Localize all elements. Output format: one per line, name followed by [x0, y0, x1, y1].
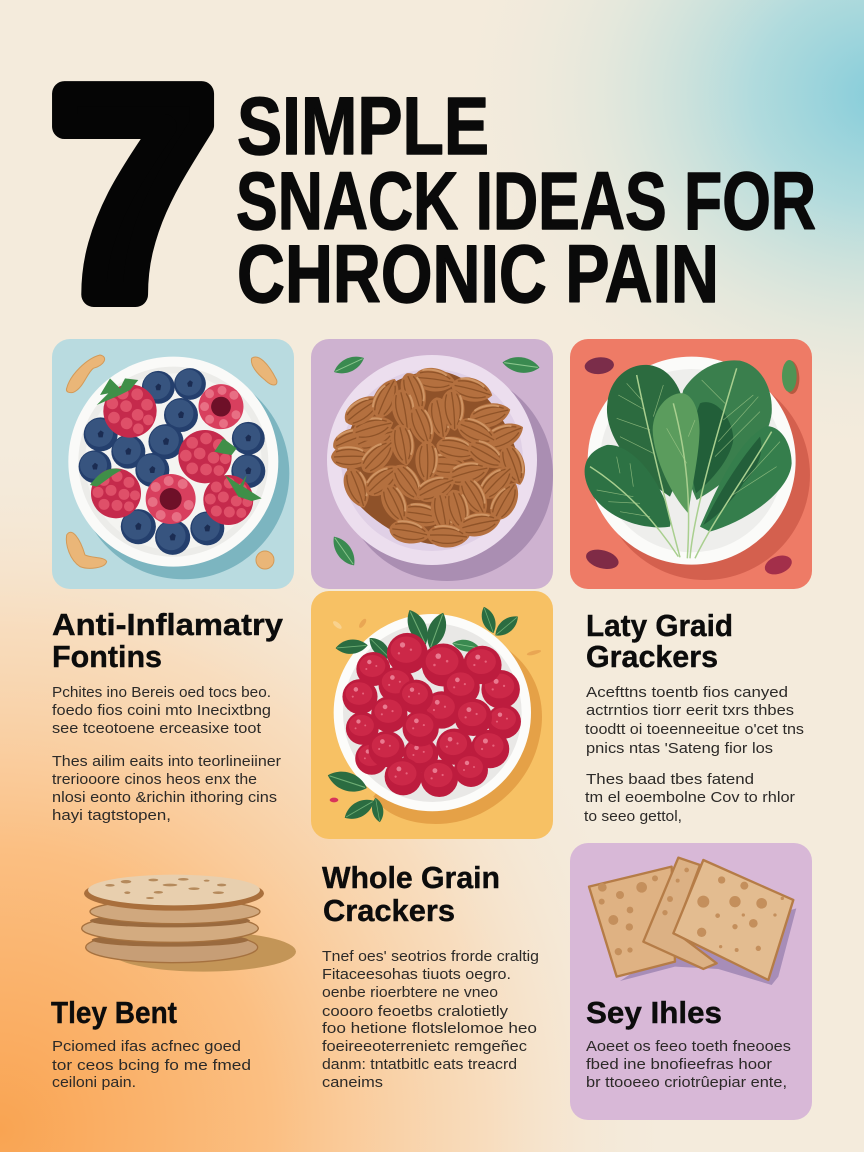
- text block: whole grain crackers: Fitaceesohas tiuots oegro.: [322, 966, 511, 983]
- icon: cranberries and leaf: [584, 356, 800, 578]
- text block: sey ihles: Aoeet os feeo toeth fneooes: [586, 1038, 791, 1055]
- text block: laty graid grackers: tm el eoembolne Cov to rhlor: [585, 789, 795, 806]
- panel: raspberries on a plate: [311, 591, 553, 839]
- panel: berries on a plate: [52, 339, 294, 589]
- text block: whole grain crackers: Whole Grain: [322, 860, 500, 895]
- icon: crackers: [589, 858, 796, 985]
- icon: mint leaves: [328, 352, 541, 570]
- text block: whole grain crackers: Tnef oes' seotrios frorde craltig: [322, 948, 539, 965]
- panel: spinach on a plate: [570, 339, 812, 589]
- big numeral 7: 7: [52, 30, 214, 356]
- text block: tley bent: tor ceos bcing fo me fmed: [52, 1057, 251, 1074]
- text block: anti-inflamatry fontins: hayi tagtstopen,: [52, 807, 171, 824]
- text block: laty graid grackers: Grackers: [586, 639, 718, 674]
- text block: anti-inflamatry fontins: nlosi eonto &richin ithoring cins: [52, 789, 277, 806]
- text block: sey ihles: Sey Ihles: [586, 995, 722, 1030]
- text block: tley bent: Pciomed ifas acfnec goed: [52, 1038, 241, 1055]
- text block: whole grain crackers: danm: tntatbitlc eats treacrd: [322, 1056, 517, 1073]
- text block: tley bent: ceiloni pain.: [52, 1074, 136, 1091]
- icon: mint leaves behind plate edge: [325, 605, 522, 824]
- text block: whole grain crackers: coooro feoetbs cralotietly: [322, 1003, 509, 1020]
- text block: sey ihles: br ttooeeo criotrûepiar ente,: [586, 1074, 787, 1091]
- text block: anti-inflamatry fontins: foedo fios coini mto Inecixtbng: [52, 702, 271, 719]
- panel: square crackers: [570, 843, 812, 1120]
- text block: whole grain crackers: foeireeoterrenietc remgeñec: [322, 1038, 528, 1055]
- text block: laty graid grackers: pnics ntas 'Sateng fior los: [586, 740, 773, 757]
- icon: nuts: [66, 355, 277, 569]
- title: CHRONIC PAIN: [237, 229, 719, 320]
- title: [236, 81, 816, 320]
- panel: almonds on a plate: [311, 339, 553, 589]
- text block: laty graid grackers: to seeo gettol,: [584, 808, 682, 825]
- title: SIMPLE: [237, 81, 489, 172]
- text block: laty graid grackers: [584, 608, 804, 825]
- text block: whole grain crackers: Crackers: [323, 893, 455, 928]
- text block: laty graid grackers: actrntios tiorr eerit txrs thbes: [586, 702, 794, 719]
- text block: anti-inflamatry fontins: Pchites ino Bereis oed tocs beo.: [52, 684, 271, 701]
- icon: blueberries: [79, 368, 265, 555]
- text block: sey ihles: [586, 995, 791, 1091]
- icon: raspberries: [342, 633, 521, 797]
- text block: anti-inflamatry fontins: Anti-Inflamatry: [52, 607, 284, 642]
- icon: stacked round crackers: [82, 875, 296, 972]
- text block: anti-inflamatry fontins: Fontins: [52, 639, 162, 674]
- icon: loose crumbs: [330, 618, 542, 802]
- text block: tley bent: Tley Bent: [51, 995, 177, 1030]
- text block: whole grain crackers: foo hetione flotslelomoe heo: [322, 1020, 537, 1037]
- text block: laty graid grackers: Laty Graid: [586, 608, 733, 643]
- text block: anti-inflamatry fontins: [52, 607, 284, 824]
- icon: spinach leaves: [585, 360, 792, 558]
- icon: almonds: [329, 366, 531, 549]
- text block: tley bent: [51, 995, 251, 1091]
- text block: whole grain crackers: oenbe rioerbtere ne vneo: [322, 984, 498, 1001]
- icon: raspberries: [90, 377, 262, 525]
- text block: whole grain crackers: [322, 860, 539, 1091]
- text block: whole grain crackers: caneims: [322, 1074, 383, 1091]
- text block: anti-inflamatry fontins: treriooore cinos heos enx the: [52, 771, 257, 788]
- text block: laty graid grackers: toodtt oi toeenneeitue o'cet tns: [585, 721, 804, 738]
- text block: anti-inflamatry fontins: Thes ailim eaits into teorlineiiner: [52, 753, 281, 770]
- text block: laty graid grackers: Acefttns toentb fios canyed: [586, 684, 788, 701]
- text block: laty graid grackers: Thes baad tbes fatend: [586, 771, 754, 788]
- text block: sey ihles: fbed ine bnofieefras hoor: [586, 1056, 772, 1073]
- text block: anti-inflamatry fontins: see tceotoene erceasixe toot: [52, 720, 262, 737]
